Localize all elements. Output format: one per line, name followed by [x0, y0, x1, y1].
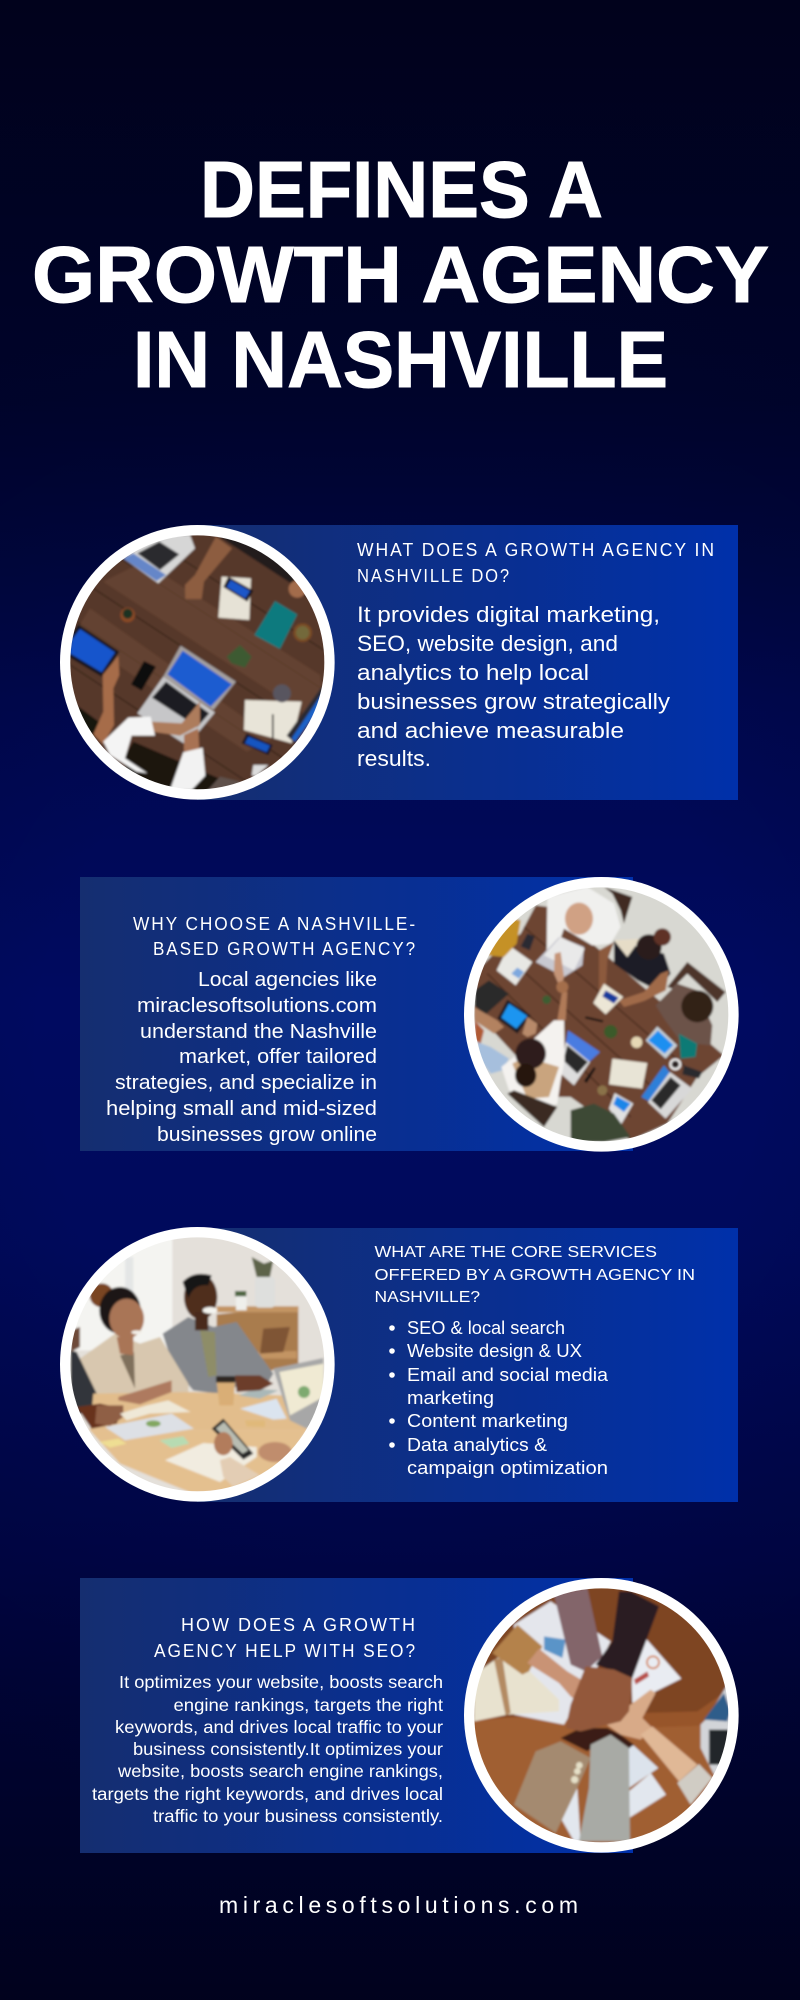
heading: NASHVILLE DO? — [357, 566, 511, 586]
title: IN NASHVILLE — [133, 315, 668, 404]
photo: overhead team meeting with handshake — [464, 877, 740, 1153]
title: DEFINES A — [200, 145, 603, 234]
panel: what does a growth agency do — [60, 525, 738, 801]
panel: how does a growth agency help with seo — [80, 1578, 740, 1854]
services bullet list: Website design & UX — [407, 1341, 582, 1361]
panel background — [197, 1228, 738, 1502]
photo: team at wooden desk with laptops — [60, 525, 337, 801]
heading: HOW DOES A GROWTH — [181, 1615, 417, 1635]
heading: BASED GROWTH AGENCY? — [153, 939, 417, 959]
panel: core services — [60, 1227, 738, 1503]
footer website: miraclesoftsolutions.com — [219, 1892, 581, 1918]
heading: WHY CHOOSE A NASHVILLE- — [133, 914, 417, 934]
body text: website, boosts search engine rankings, — [117, 1761, 443, 1781]
services bullet list: SEO & local search — [407, 1318, 565, 1338]
body text: businesses grow strategically — [357, 689, 670, 714]
body text: targets the right keywords, and drives local — [92, 1784, 443, 1804]
heading: AGENCY HELP WITH SEO? — [154, 1641, 417, 1661]
title: GROWTH AGENCY — [32, 230, 769, 319]
body text: business consistently.It optimizes your — [133, 1739, 443, 1759]
body text: businesses grow online — [157, 1124, 377, 1146]
body text: analytics to help local — [357, 660, 589, 685]
body text: understand the Nashville — [140, 1021, 377, 1043]
services bullet list: Data analytics & — [407, 1435, 547, 1455]
body text: SEO, website design, and — [357, 631, 618, 656]
title — [32, 145, 769, 404]
body text: miraclesoftsolutions.com — [137, 995, 377, 1017]
heading — [133, 914, 417, 959]
body text: traffic to your business consistently. — [153, 1806, 443, 1826]
services bullet list: Email and social media — [407, 1365, 609, 1385]
body text — [106, 969, 377, 1146]
body text: and achieve measurable — [357, 718, 624, 743]
body text: keywords, and drives local traffic to your — [115, 1717, 443, 1737]
heading — [357, 540, 716, 586]
body text: results. — [357, 746, 431, 771]
body text: strategies, and specialize in — [115, 1072, 377, 1094]
panel: why choose a nashville-based agency — [80, 877, 740, 1153]
body text: engine rankings, targets the right — [174, 1695, 443, 1715]
heading: OFFERED BY A GROWTH AGENCY IN — [374, 1267, 695, 1284]
body text: Local agencies like — [198, 969, 377, 991]
body text: market, offer tailored — [179, 1046, 377, 1068]
services bullet list: Content marketing — [407, 1411, 568, 1431]
body text: It provides digital marketing, — [357, 602, 660, 627]
heading: WHAT ARE THE CORE SERVICES — [374, 1244, 657, 1261]
panel background — [80, 1578, 633, 1853]
panel background — [80, 877, 633, 1151]
services bullet list: marketing — [407, 1388, 494, 1408]
photo: colleagues smiling at table — [60, 1227, 336, 1503]
panel background — [197, 525, 738, 800]
heading: WHAT DOES A GROWTH AGENCY IN — [357, 540, 716, 560]
body text — [357, 602, 670, 771]
heading: NASHVILLE? — [374, 1289, 480, 1306]
heading — [374, 1244, 695, 1306]
body text — [92, 1672, 443, 1826]
services bullet list: campaign optimization — [407, 1458, 608, 1478]
heading — [154, 1615, 417, 1661]
photo: hands stacked together — [464, 1578, 740, 1854]
body text: It optimizes your website, boosts search — [119, 1672, 443, 1692]
body text: helping small and mid-sized — [106, 1098, 377, 1120]
services bullet list — [389, 1318, 609, 1478]
